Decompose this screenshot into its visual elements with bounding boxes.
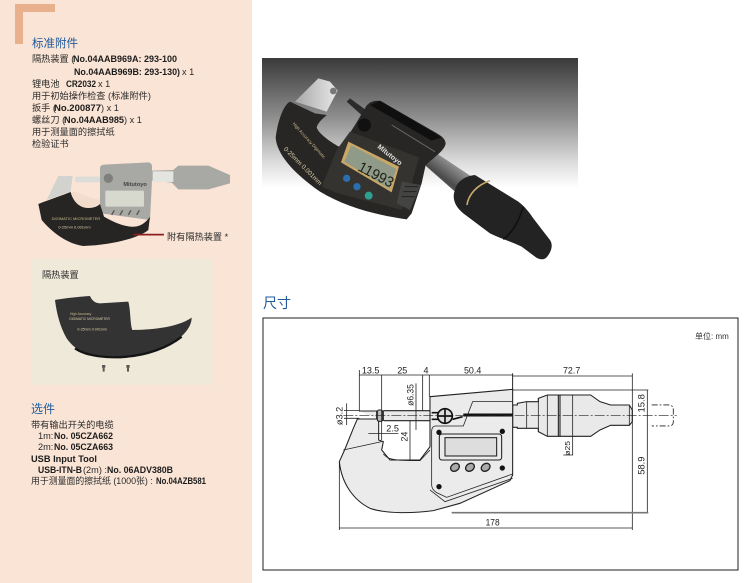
options list: 带有输出开关的电缆 [31, 419, 114, 430]
frame body [276, 101, 446, 219]
options list: 用于测量面的擦拭纸 (1000张) : [31, 475, 153, 486]
left part: micrometer body [335, 365, 513, 530]
left part: micrometer body: ø6.35 [406, 384, 416, 406]
accessory list: 检验证书 [32, 138, 69, 149]
options list: 2m: [38, 442, 53, 452]
panel: standard accessories text [32, 36, 194, 149]
accessory list: x 1 [98, 79, 110, 89]
left part: micrometer body: 4 [423, 365, 428, 375]
left part: micrometer body: 13.5 [362, 365, 379, 375]
left part: micrometer body: 2.5 [386, 424, 399, 434]
face plate [322, 132, 419, 210]
brand: Mitutoyo [376, 144, 403, 167]
accessory list: 隔热装置 ( [32, 53, 74, 64]
options list: USB-ITN-B [38, 464, 82, 475]
accessory list: ) x 1 [124, 115, 142, 125]
ratchet thimble [454, 175, 552, 259]
heading: standard accessories: 标准附件 [32, 36, 78, 50]
options list: No.04AZB581 [156, 475, 206, 486]
options list: 1m: [38, 431, 53, 441]
insulator shape: DIGIMATIC MICROMETER [69, 317, 111, 321]
screws [436, 429, 505, 489]
left part: micrometer body: 24 [400, 432, 410, 442]
heading: options: 选件 [31, 402, 55, 416]
callout: with heat insulator: 附有隔热装置 * [167, 231, 229, 242]
options list: No. 05CZA663 [54, 441, 113, 452]
accessory list: ) x 1 [101, 103, 119, 113]
figure: micrometer with heat insulator: DIGIMATIC MICROMETER [52, 216, 100, 221]
clamp dial [438, 409, 452, 423]
label: unit: 单位: mm [695, 331, 729, 341]
options list: No. 06ADV380B [107, 464, 173, 475]
right part: sleeve and thimble [339, 365, 677, 530]
thick centre band [463, 410, 513, 419]
screws [102, 365, 130, 372]
right part: sleeve and thimble: 72.7 [563, 365, 580, 375]
sleeve [421, 153, 472, 192]
right part: sleeve and thimble: 58.9 [637, 456, 647, 475]
options list [31, 419, 206, 486]
options list: (2m) : [83, 465, 107, 475]
grey micrometer body [100, 162, 230, 220]
accessory list: 用于初始操作检查 (标准附件) [32, 90, 151, 101]
accessory list: No.04AAB969A: 293-100 [73, 53, 177, 64]
panel: options text [31, 402, 206, 486]
insulator shape [55, 296, 192, 372]
anvil [295, 78, 338, 112]
photo: micrometer on gradient: 0-25mm 0.001mm [282, 146, 323, 187]
buttons [343, 175, 350, 182]
right part: sleeve and thimble: ø25 [563, 441, 572, 456]
left part: micrometer body: ø3.2 [335, 407, 345, 425]
left part: micrometer body: 50.4 [464, 365, 481, 375]
insulator shape: 0-25mm 0.001mm [77, 328, 107, 332]
figure: micrometer with heat insulator: Mitutoyo [123, 182, 147, 188]
label: heat insulator: 隔热装置 [42, 269, 79, 280]
accessory list: 扳手 ( [32, 102, 56, 113]
panel: heat insulator photo [32, 259, 212, 385]
accessory list: 螺丝刀 ( [32, 114, 65, 125]
spindle [347, 98, 375, 123]
insulator shape: High Accuracy [70, 312, 92, 316]
figure: micrometer with heat insulator [38, 162, 230, 246]
accessory list: 用于测量面的擦拭纸 [32, 126, 115, 137]
dimension lines right [513, 373, 648, 530]
photo: micrometer on gradient [262, 58, 578, 259]
dashed spindle travel [652, 405, 673, 426]
display frame [439, 434, 502, 460]
accessory list: No.04AAB985 [64, 114, 124, 125]
figure: micrometer with heat insulator: 0-25mm 0.001mm [58, 225, 91, 230]
accessory list: x 1 [182, 67, 194, 77]
options list: USB Input Tool [31, 453, 97, 464]
spindle [383, 411, 430, 421]
photo: micrometer on gradient: 11993 [355, 159, 396, 191]
black heat insulator [38, 192, 150, 246]
accessory list: CR2032 [66, 78, 96, 89]
left part: micrometer body: 25 [397, 365, 407, 375]
panel: left sidebar background [0, 0, 252, 583]
accessory list: 锂电池 [32, 78, 60, 89]
right part: sleeve and thimble: 15.8 [637, 394, 647, 412]
leader line [133, 232, 164, 237]
buttons [449, 462, 492, 473]
panel: dimensions drawing frame [263, 318, 738, 570]
frame lettering: High Accuracy Digimatic [292, 121, 327, 160]
dimension lines left [359, 370, 513, 440]
accessory list [32, 53, 194, 149]
icon: corner bracket [15, 4, 55, 44]
accessory list: No.200877 [54, 102, 101, 113]
left part: micrometer body: 178 [486, 518, 500, 528]
options list: No. 05CZA662 [54, 430, 113, 441]
display [341, 142, 399, 192]
heading: dimensions: 尺寸 [263, 295, 291, 311]
accessory list: No.04AAB969B: 293-130) [74, 66, 180, 77]
technical drawing [335, 365, 677, 530]
